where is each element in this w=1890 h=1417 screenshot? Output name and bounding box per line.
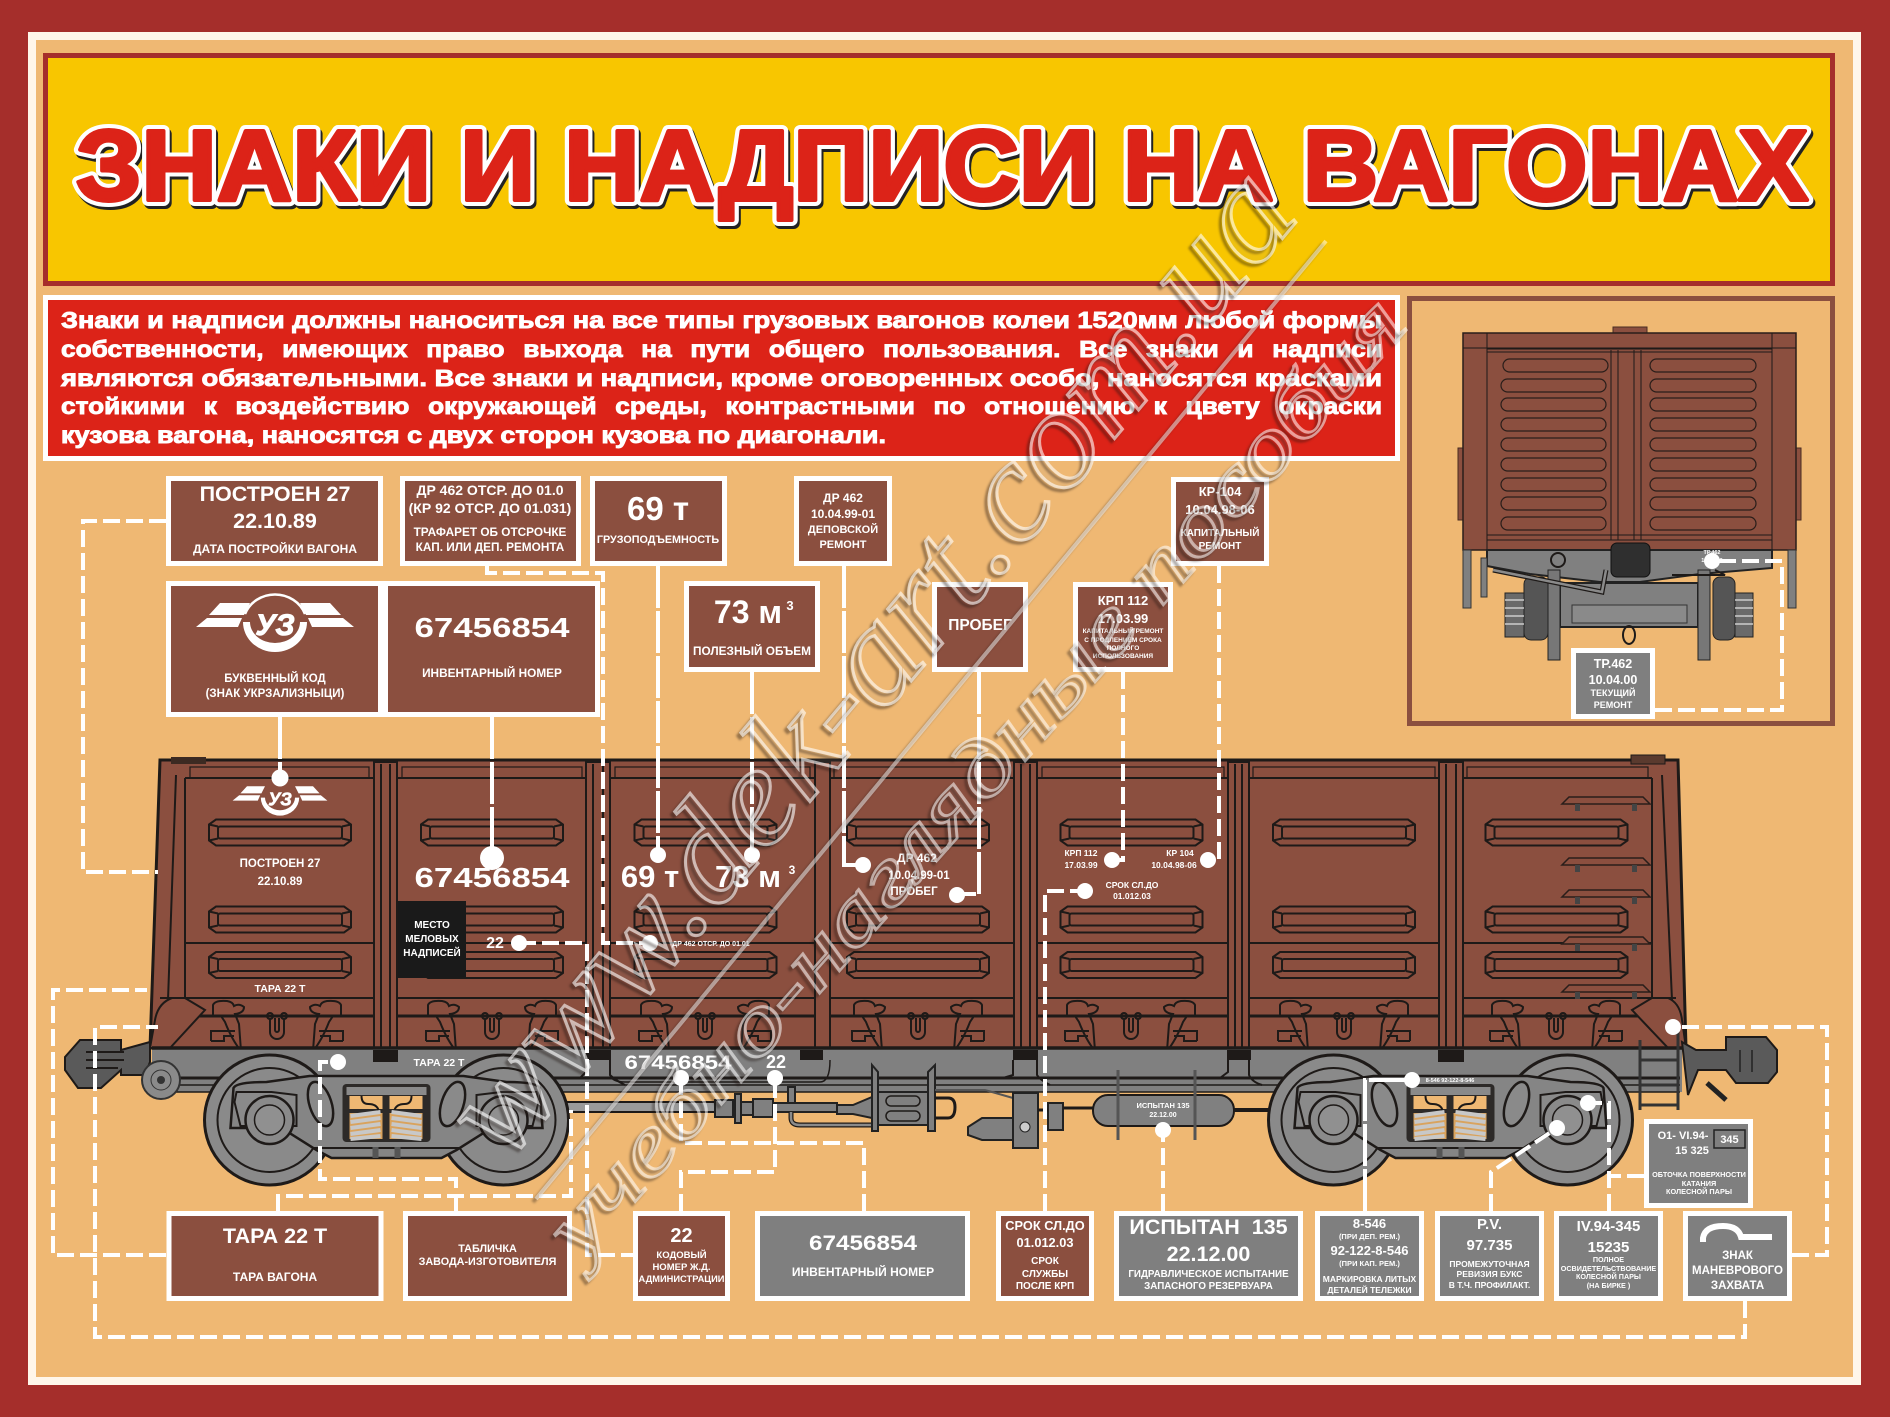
box: P.V.: 97.735 — [1467, 1237, 1512, 1254]
black chalk marks area: МЕСТО — [414, 920, 450, 931]
box: кодовый номер: КОДОВЫЙ — [656, 1249, 707, 1261]
box: кодовый номер: НОМЕР Ж.Д. — [652, 1262, 711, 1273]
box: буквенный код — [168, 584, 380, 714]
box: инвентарный номер grey — [758, 1214, 968, 1298]
on-car markings: ТР.462 — [1704, 550, 1720, 556]
box: срок службы: СРОК СЛ.ДО — [1005, 1218, 1085, 1233]
brake cylinder and piping — [563, 1065, 1272, 1148]
intro text panel: являются обязательными. Все знаки и надписи, кроме оговоренных особо, наносятся красками — [60, 365, 1382, 391]
connector: wheel tread — [1609, 1174, 1644, 1178]
connector: reservoir test — [1161, 1130, 1165, 1211]
embossed ribs — [209, 820, 1628, 978]
box: инвентарный номер grey: ИНВЕНТАРНЫЙ НОМЕР — [792, 1264, 934, 1279]
box: полезный объем: 3 — [786, 598, 794, 613]
box: построен: ПОСТРОЕН 27 — [200, 482, 350, 506]
connector: depot repair — [844, 566, 863, 865]
box: знак маневрового захвата — [1686, 1214, 1790, 1298]
box: деповской ремонт — [796, 478, 890, 564]
on-car markings: ПРОБЕГ — [890, 886, 938, 898]
connector: code 22 frame — [681, 1078, 775, 1211]
box: капитальный ремонт: РЕМОНТ — [1199, 541, 1241, 552]
box: капитальный ремонт: КАПИТАЛЬНЫЙ — [1181, 526, 1259, 539]
box: испытан: ЗАПАСНОГО РЕЗЕРВУАРА — [1144, 1281, 1273, 1292]
intro text panel: собственности, имеющих право выхода на пути общего пользования. Все знаки и надписи — [61, 336, 1382, 362]
box: КРП: ИСПОЛЬЗОВАНИЯ — [1093, 653, 1153, 660]
on-car markings: ТАРА 22 Т — [414, 1057, 465, 1069]
box: трафарет об отсрочке: ДР 462 ОТСР. ДО 01.0 — [416, 482, 564, 498]
end view body — [1458, 327, 1801, 550]
on-car markings: 22 — [766, 1052, 786, 1072]
box: обточка поверхности: 15 325 — [1675, 1145, 1709, 1157]
box: КРП: ПОЛНОГО — [1107, 645, 1139, 652]
title banner — [46, 56, 1832, 284]
box: табличка завода — [406, 1214, 570, 1298]
box: табличка завода: ЗАВОДА-ИЗГОТОВИТЕЛЯ — [419, 1256, 557, 1268]
box: построен: ДАТА ПОСТРОЙКИ ВАГОНА — [193, 541, 357, 556]
right bogie — [1268, 1055, 1632, 1185]
on-car markings: 10.04.98-06 — [1151, 860, 1197, 870]
box: знак маневрового захвата: ЗАХВАТА — [1711, 1280, 1764, 1292]
connector lines — [53, 521, 1827, 1337]
left bogie — [204, 1055, 568, 1185]
on-car markings — [233, 550, 1723, 1084]
box: текущий ремонт: ТЕКУЩИЙ — [1591, 687, 1635, 698]
box: капитальный ремонт: 10.04.98-06 — [1185, 502, 1255, 517]
box: грузоподъемность: ГРУЗОПОДЪЕМНОСТЬ — [597, 534, 719, 546]
connector: inventory number — [490, 717, 494, 858]
icon: UZ logo — [196, 594, 354, 652]
connector: date built — [83, 521, 166, 872]
box: маркировка литых деталей: 92-122-8-546 — [1330, 1243, 1409, 1258]
box: полезный объем: ПОЛЕЗНЫЙ ОБЪЕМ — [693, 644, 811, 658]
box: трафарет об отсрочке: КАП. ИЛИ ДЕП. РЕМОНТА — [416, 540, 565, 554]
box: IV.94-345: (НА БИРКЕ ) — [1587, 1281, 1631, 1290]
black chalk marks area: МЕЛОВЫХ — [405, 934, 459, 945]
reservoir: ИСПЫТАН 135 — [1136, 1101, 1190, 1110]
icon: hump sign — [1703, 1226, 1772, 1242]
box: буквенный код: БУКВЕННЫЙ КОД — [224, 672, 326, 685]
on-car markings: 22.10.89 — [258, 876, 302, 888]
box: КРП: 17.03.99 — [1098, 611, 1148, 626]
box: маркировка литых деталей: 8-546 — [1353, 1216, 1386, 1231]
on-car markings: 17.03.99 — [1064, 860, 1098, 870]
connector: tare top — [278, 1110, 571, 1211]
on-car markings: 8-546 92-122-8-546 — [1426, 1078, 1474, 1084]
box: маркировка литых деталей: (ПРИ ДЕП. РЕМ.) — [1339, 1232, 1401, 1241]
box: грузоподъемность: 69 т — [627, 490, 689, 527]
connector: tare left — [53, 990, 166, 1255]
box: построен: 22.10.89 — [233, 509, 317, 533]
on-car markings: 01.012.03 — [1113, 891, 1151, 901]
box: капитальный ремонт — [1174, 480, 1266, 564]
box: инвентарный номер: 67456854 — [414, 612, 570, 643]
on-car markings: 67456854 — [414, 862, 570, 893]
box: полезный объем — [686, 584, 818, 670]
on-car markings: ДР 462 ОТСР. ДО 01.01 — [672, 941, 750, 948]
box: срок службы: СРОК — [1031, 1256, 1060, 1267]
box: инвентарный номер grey: 67456854 — [809, 1232, 917, 1255]
wagon frame — [152, 1048, 1686, 1092]
box: P.V.: ПРОМЕЖУТОЧНАЯ — [1449, 1259, 1530, 1269]
bottom boxes — [169, 1122, 1790, 1298]
connector: shunting sign bottom — [95, 1027, 1745, 1337]
box: КРП: С ПРОДЛЕНИЕМ СРОКА — [1084, 637, 1162, 644]
box: IV.94-345 — [1556, 1214, 1660, 1298]
door locks — [211, 1001, 1622, 1051]
small UZ logo: УЗ — [268, 789, 292, 809]
box: капитальный ремонт: КР-104 — [1199, 484, 1242, 499]
box: знак маневрового захвата: ЗНАК — [1722, 1250, 1754, 1262]
on-car markings: 22 — [486, 935, 504, 952]
connector: code 22 side — [519, 943, 633, 1255]
box: маркировка литых деталей: ДЕТАЛЕЙ ТЕЛЕЖКИ — [1327, 1284, 1412, 1295]
on-car markings: 10.04.99-01 — [888, 870, 950, 882]
connector: KRP — [1112, 672, 1123, 860]
connector: shunting sign right — [1673, 1027, 1827, 1255]
wagon side view — [65, 550, 1777, 1185]
box: срок службы: 01.012.03 — [1017, 1235, 1073, 1250]
box: срок службы: СЛУЖБЫ — [1022, 1269, 1068, 1280]
intro text panel: стойкими к воздействию окружающей среды, контрастными по отношению к цвету окраски — [61, 393, 1382, 419]
watermark site name: www.dek-art.com.ua — [410, 135, 1326, 1185]
box: обточка поверхности: ОБТОЧКА ПОВЕРХНОСТИ — [1652, 1170, 1746, 1179]
box: IV.94-345: ОСВИДЕТЕЛЬСТВОВАНИЕ — [1561, 1264, 1656, 1273]
on-car markings: 73 м — [715, 859, 781, 894]
right coupler and ladder — [1640, 1030, 1777, 1110]
on-car markings: ПОСТРОЕН 27 — [240, 858, 320, 870]
box: обточка поверхности: 345 — [1720, 1134, 1739, 1146]
box: текущий ремонт: 10.04.00 — [1589, 673, 1637, 687]
box: IV.94-345: IV.94-345 — [1577, 1218, 1640, 1235]
connector: KR — [1208, 566, 1219, 860]
box: буквенный код: (ЗНАК УКРЗАЛИЗНЫЦИ) — [206, 688, 345, 700]
box: пробег: ПРОБЕГ — [948, 617, 1012, 634]
box: деповской ремонт: РЕМОНТ — [819, 539, 867, 551]
connector: cast parts marking — [1365, 1080, 1412, 1211]
box: табличка завода: ТАБЛИЧКА — [458, 1243, 517, 1255]
box: тара вагона: ТАРА ВАГОНА — [233, 1270, 317, 1284]
box: знак маневрового захвата: МАНЕВРОВОГО — [1692, 1265, 1783, 1277]
box: инвентарный номер: ИНВЕНТАРНЫЙ НОМЕР — [422, 666, 562, 680]
on-car markings: 10.04.00 — [1701, 558, 1723, 564]
box: текущий ремонт: РЕМОНТ — [1594, 700, 1633, 710]
on-car markings: 69 т — [621, 859, 679, 894]
connector: inventory frame — [681, 1078, 864, 1211]
box: P.V.: P.V. — [1477, 1216, 1502, 1233]
box: P.V. — [1438, 1214, 1542, 1298]
box: деповской ремонт: ДР 462 — [823, 491, 863, 505]
box: P.V.: РЕВИЗИЯ БУКС — [1457, 1269, 1522, 1279]
on-car markings: КРП 112 — [1064, 848, 1098, 858]
steps on end panel — [1562, 797, 1650, 999]
box: грузоподъемность — [592, 478, 724, 564]
box: испытан: ГИДРАВЛИЧЕСКОЕ ИСПЫТАНИЕ — [1128, 1269, 1289, 1280]
box: инвентарный номер — [386, 584, 598, 714]
box: испытан: ИСПЫТАН 135 — [1129, 1215, 1288, 1239]
connector: capacity — [656, 566, 660, 855]
small UZ logo — [233, 786, 327, 816]
box: IV.94-345: 15235 — [1588, 1239, 1629, 1256]
connector: plate — [320, 1062, 456, 1211]
box: IV.94-345: КОЛЕСНОЙ ПАРЫ — [1576, 1272, 1641, 1281]
box: маркировка литых деталей: МАРКИРОВКА ЛИТЫХ — [1323, 1274, 1417, 1284]
connector: letter code — [278, 717, 282, 778]
box: текущий ремонт: ТР.462 — [1594, 657, 1632, 671]
box: обточка поверхности: О1- VI.94- — [1658, 1130, 1709, 1142]
box: маркировка литых деталей: (ПРИ КАП. РЕМ.) — [1339, 1259, 1400, 1268]
box: трафарет об отсрочке: ТРАФАРЕТ ОБ ОТСРОЧКЕ — [414, 525, 567, 539]
box: тара вагона — [169, 1214, 381, 1298]
box: тара вагона: ТАРА 22 Т — [223, 1224, 327, 1248]
box: трафарет об отсрочке: (КР 92 ОТСР. ДО 01.031) — [409, 500, 571, 516]
left coupler — [65, 1040, 180, 1099]
connector: current repair — [1655, 561, 1782, 710]
box: трафарет об отсрочке — [402, 478, 578, 564]
box: P.V.: В Т.Ч. ПРОФИЛАКТ. — [1449, 1280, 1530, 1290]
connector: deferment stencil — [487, 566, 650, 943]
box: срок службы: ПОСЛЕ КРП — [1016, 1281, 1074, 1292]
reservoir — [1093, 1070, 1234, 1140]
box: обточка поверхности: КОЛЕСНОЙ ПАРЫ — [1666, 1187, 1732, 1196]
on-car markings: КР 104 — [1166, 848, 1194, 858]
box: деповской ремонт: ДЕПОВСКОЙ — [808, 523, 878, 536]
on-car markings: 67456854 — [624, 1053, 732, 1074]
title banner: ЗНАКИ И НАДПИСИ НА ВАГОНАХ — [76, 110, 1808, 222]
posts — [374, 762, 1463, 1054]
box: маркировка литых деталей — [1318, 1214, 1422, 1298]
box: пробег — [934, 584, 1026, 670]
marker dots — [272, 553, 1720, 1138]
box: КРП — [1076, 584, 1170, 670]
box: кодовый номер: 22 — [670, 1225, 693, 1247]
black chalk marks area: НАДПИСЕЙ — [403, 946, 461, 959]
box: кодовый номер: АДМИНИСТРАЦИИ — [639, 1274, 725, 1284]
reservoir: 22.12.00 — [1149, 1112, 1177, 1119]
intro text panel — [46, 298, 1398, 458]
box: текущий ремонт — [1574, 650, 1652, 716]
box: испытан: 22.12.00 — [1167, 1242, 1250, 1266]
title text: ЗНАКИ И НАДПИСИ НА ВАГОНАХ — [76, 110, 1808, 222]
black chalk marks area — [398, 901, 466, 978]
box: обточка поверхности: КАТАНИЯ — [1682, 1179, 1716, 1188]
intro text panel: Знаки и надписи должны наноситься на все типы грузовых вагонов колеи 1520мм любой формы — [61, 307, 1382, 333]
intro text panel: кузова вагона, наносятся с двух сторон кузова по диагонали. — [61, 422, 886, 448]
box: кодовый номер — [636, 1214, 728, 1298]
on-car markings: 3 — [789, 863, 796, 877]
connector: volume — [750, 672, 754, 855]
connector: service life — [1045, 891, 1085, 1211]
box: КРП: КРП 112 — [1098, 593, 1148, 608]
connector: IV.94 — [1588, 1103, 1609, 1211]
icon: UZ logo: УЗ — [255, 609, 295, 642]
on-car markings: ТАРА 22 Т — [255, 983, 306, 995]
box: полезный объем: 73 м — [714, 594, 782, 630]
watermark slogan: учебно-наглядные пособия — [519, 276, 1425, 1282]
watermark — [410, 135, 1425, 1282]
box: КРП: КАПИТАЛЬНЫЙ РЕМОНТ — [1083, 626, 1163, 635]
end view undercarriage — [1463, 543, 1796, 660]
connector: P.V. — [1491, 1128, 1557, 1211]
box: IV.94-345: ПОЛНОЕ — [1593, 1255, 1624, 1264]
box: срок службы — [998, 1214, 1092, 1298]
connector: mileage — [957, 672, 979, 894]
panel: end view of wagon — [1410, 298, 1832, 724]
on-car markings: ДР 462 — [897, 851, 937, 865]
box: построен — [168, 478, 380, 564]
box: испытан — [1116, 1214, 1300, 1298]
wagon body — [150, 755, 1686, 1054]
watermark line — [536, 241, 1326, 1199]
box: обточка поверхности — [1646, 1122, 1750, 1206]
box: деповской ремонт: 10.04.99-01 — [811, 507, 875, 521]
on-car markings: СРОК СЛ.ДО — [1106, 880, 1159, 890]
